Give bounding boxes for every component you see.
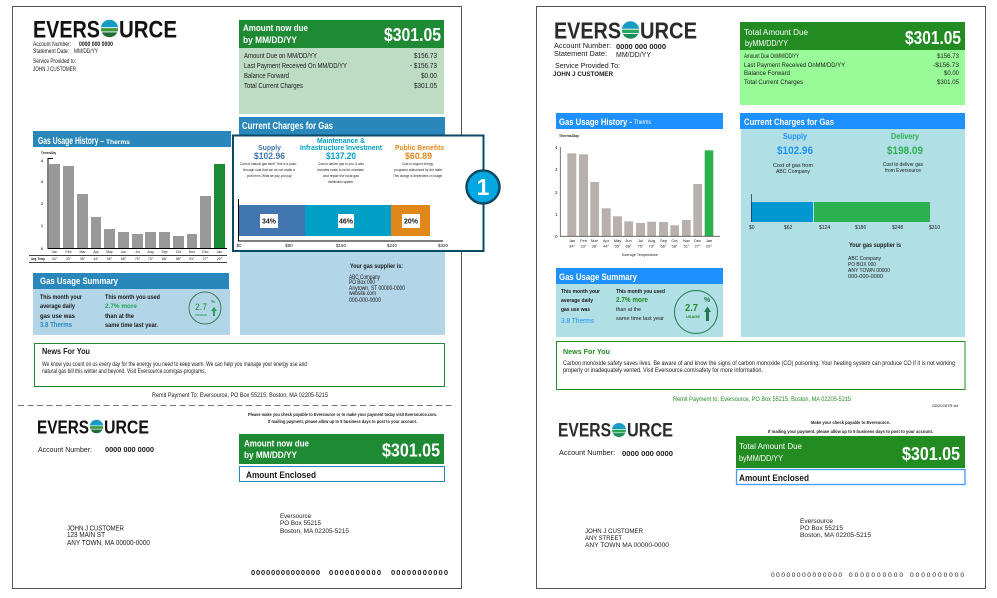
logo: Eversource payment stub <box>37 416 149 438</box>
panel: total amount due: byMM/DD/YY <box>745 39 789 48</box>
customer address: JOHN J CUSTOMER <box>585 528 643 535</box>
stub: amount due: $301.05 <box>382 440 440 460</box>
stacked bar: charge shares: 46% <box>339 218 354 226</box>
panel: gas usage summary: same time last year. <box>105 322 158 329</box>
bar chart: therms per day: 66° <box>660 244 667 248</box>
bar chart: therms per day: Mar <box>591 238 599 243</box>
panel: gas usage history: Gas Usage History – <box>38 136 104 147</box>
account details: Statement Date: <box>33 49 69 55</box>
panel: gas usage summary: 2.7% more <box>616 297 648 304</box>
charge: supply: through cost that we do not make a <box>243 168 295 172</box>
payment instructions: Make your check payable to Eversource. <box>811 420 890 425</box>
panel: gas usage history <box>555 113 723 257</box>
panel: total amount due <box>740 22 965 105</box>
stacked bar: supply and delivery: $186 <box>855 225 866 231</box>
stacked bar: supply and delivery: $310 <box>929 225 940 231</box>
bar chart: therms per day: 66° <box>162 257 168 261</box>
bar chart: therms per day: Oct <box>671 238 678 243</box>
icon: usage change gauge: % <box>211 299 215 304</box>
charge: delivery: Cost to deliver gas <box>883 162 923 168</box>
bar chart: therms per day: Oct <box>176 250 181 254</box>
bar chart: therms per day: 38° <box>80 257 86 261</box>
supplier details: Your gas supplier is <box>849 242 901 249</box>
panel: news for you: Carbon monoxide safety saves lives. Be aware of and know the signs of carbon monoxide (CO) poisoning. Your heating system can produce CO if it is not working <box>563 361 955 367</box>
icon: usage change gauge <box>674 290 718 334</box>
account details <box>33 42 114 73</box>
charge: maintenance and infrastructure investment <box>300 138 383 184</box>
bar chart: therms per day: 68° <box>121 257 127 261</box>
bar chart: therms per day: Jan <box>706 238 712 243</box>
charge: supply <box>240 145 297 178</box>
panel: gas usage summary: average daily <box>561 298 594 304</box>
bar chart: therms per day: Apr <box>93 250 100 254</box>
panel: gas usage summary: 3.8 Therms <box>561 316 594 325</box>
remit address line: Remit Payment To: Eversource, PO Box 55215, Boston, MA 02205-5215 <box>152 392 328 399</box>
panel: gas usage summary: gas use was <box>561 307 590 313</box>
account details: JOHN J CUSTOMER <box>553 71 613 78</box>
panel: total amount due: Total Current Charges <box>744 79 804 86</box>
panel: news for you: News For You <box>42 347 90 356</box>
bar chart: therms per day: 0 <box>41 247 43 251</box>
supplier details <box>348 263 406 304</box>
bar chart: therms per day: 44° <box>603 244 609 248</box>
bar chart: therms per day: 3 <box>41 180 43 184</box>
panel: amount due: by MM/DD/YY <box>243 35 297 45</box>
bar chart: therms per day <box>29 151 227 262</box>
bar chart: therms per day: 75° <box>135 257 141 261</box>
payment instructions <box>768 420 933 434</box>
bar chart: therms per day: 51° <box>683 244 690 248</box>
stub: total amount due <box>736 436 965 468</box>
charge: maintenance and infrastructure investment: Maintenance & <box>317 138 365 145</box>
bar chart: therms per day: Jan <box>52 250 57 254</box>
charge: public benefits: This charge is dependent on usage. <box>393 174 443 178</box>
charge: public benefits <box>393 145 444 178</box>
bar chart: therms per day: 73° <box>648 244 655 248</box>
bar chart: therms per day: Dec <box>694 238 701 243</box>
stub account number: 0000 000 0000 <box>105 445 154 454</box>
panel: gas usage summary: Gas Usage Summary <box>40 276 119 287</box>
charge: supply: Supply <box>258 145 281 152</box>
remittance address: PO Box 55215 <box>280 520 321 527</box>
customer address: ANY TOWN MA 00000-0000 <box>585 542 669 549</box>
supplier details: ABC Company <box>349 275 380 281</box>
panel: amount due: Total Current Charges <box>244 83 303 90</box>
bar chart: therms per day: 38° <box>591 244 598 248</box>
charge: supply: profit from. What we pay, you pay. <box>247 174 292 178</box>
bar chart: therms per day: Aug <box>147 250 154 254</box>
payment instructions: Please make you check payable to Eversource or to make your payment today visit Eversource.com. <box>248 412 437 417</box>
stub account number: Account Number: <box>38 445 92 454</box>
panel: amount due <box>239 20 444 114</box>
panel: amount due: Balance Forward <box>244 73 289 80</box>
bar chart: therms per day: 29° <box>706 244 712 248</box>
icon: usage change gauge <box>189 292 221 324</box>
panel: gas usage summary: Gas Usage Summary <box>559 272 638 283</box>
bar chart: therms per day: Nov <box>683 238 690 243</box>
panel: gas usage history: Gas Usage History - <box>559 117 632 128</box>
bar chart: therms per day: Sep <box>660 238 668 243</box>
icon: usage change gauge: 2.7 <box>195 302 207 312</box>
bar chart: therms per day: Therms/Day <box>41 151 56 155</box>
bar chart: therms per day: 68° <box>625 244 632 248</box>
logo: Eversource payment stub: EVERS <box>37 416 89 438</box>
logo: Eversource payment stub: URCE <box>627 420 673 442</box>
charge: delivery <box>883 132 923 174</box>
bar chart: therms per day: 58° <box>671 244 678 248</box>
panel: amount due: Amount Due on MM/DD/YY <box>244 53 317 60</box>
panel: total amount due: $301.05 <box>937 79 959 86</box>
bar chart: therms per day: Feb <box>580 238 588 243</box>
bar chart: therms per day: Jan <box>217 250 222 254</box>
stub: amount enclosed: Amount Enclosed <box>246 470 316 480</box>
callout: highlighted charges box with badge <box>233 136 500 251</box>
logo: Eversource payment stub: EVERS <box>558 420 611 442</box>
panel: gas usage summary <box>556 268 723 337</box>
charge: public benefits: Cost to support energy <box>402 162 433 166</box>
panel: total amount due: $156.73 <box>937 53 959 60</box>
logo: Eversource <box>554 18 697 44</box>
remittance address: Eversource <box>800 518 833 525</box>
stub: amount due: Amount now due <box>244 438 309 448</box>
remit address line: Remit Payment to: Eversource, PO Box 55215, Boston, MA 02205-5215 <box>673 396 851 403</box>
supplier details: Your gas supplier is: <box>350 263 403 270</box>
panel: gas usage summary: This month your <box>40 294 82 301</box>
stacked bar: supply and delivery: $124 <box>819 225 830 231</box>
remittance address: PO Box 55215 <box>800 525 843 532</box>
scan line digits: 00000000000000 <box>771 572 842 579</box>
account details: Account Number: <box>554 41 611 50</box>
remittance address: Eversource <box>280 513 311 520</box>
payment instructions: If mailing payment, please allow up to 5 business days to post to your account. <box>268 419 417 424</box>
panel: gas usage summary: average daily <box>40 303 75 310</box>
panel: gas usage history: Therms <box>634 120 651 126</box>
charge: supply: Cost of natural gas itself. This is a pass- <box>240 162 297 166</box>
logo: Eversource <box>33 16 177 44</box>
panel: news for you: properly or inadequately vented. Visit Eversource.com/safety for more information. <box>563 368 763 374</box>
stacked bar: charge shares: 34% <box>262 218 277 226</box>
panel: gas usage summary: This month your <box>561 289 601 295</box>
panel: redesigned bill (right page) <box>536 6 986 588</box>
remittance address: Boston, MA 02205-5215 <box>280 528 349 535</box>
panel: gas usage summary: This month you used <box>616 289 665 295</box>
bar chart: therms per day: 29° <box>217 257 223 261</box>
bar chart: therms per day: 1 <box>555 212 558 217</box>
stub: total amount due: byMM/DD/YY <box>739 454 784 463</box>
form code: GB2026TR.txt <box>932 404 958 408</box>
supplier details: Anytown, ST 00000-0000 <box>349 286 406 292</box>
charge: public benefits: programs authorized by the state. <box>394 168 443 172</box>
panel: total amount due: Amount Due OnMM/DD/YY <box>744 53 799 60</box>
logo: Eversource payment stub <box>558 420 673 442</box>
bar chart: therms per day: 27° <box>203 257 209 261</box>
panel: current bill (left page) <box>12 6 483 588</box>
supplier details: website.com <box>348 291 376 297</box>
panel: gas usage summary: This month you used <box>105 294 160 301</box>
panel: amount due: $301.05 <box>414 83 437 90</box>
panel: total amount due: -$156.73 <box>933 62 959 69</box>
supplier details: ANY TOWN 00000 <box>848 268 890 274</box>
panel: news for you: News For You <box>563 347 610 356</box>
bar chart: therms per day: Mar <box>79 250 86 254</box>
customer address: JOHN J CUSTOMER <box>67 526 124 532</box>
bar chart: therms per day: Jan <box>569 238 575 243</box>
charge: maintenance and infrastructure investment: includes costs to build, maintain <box>317 168 364 172</box>
bar chart: therms per day <box>555 133 720 257</box>
bar chart: therms per day: Jul <box>638 238 643 243</box>
account details: MM/DD/YY <box>74 49 98 55</box>
panel: amount due: $156.73 <box>414 53 437 60</box>
customer address: 123 MAIN ST <box>67 532 106 539</box>
panel: gas usage history: Therms <box>106 140 131 146</box>
panel: amount due: Amount now due <box>243 23 308 33</box>
stacked bar: charge shares <box>236 199 449 248</box>
account details: Service Provided to: <box>33 59 76 65</box>
account details: JOHN J CUSTOMER <box>33 67 76 73</box>
charge: supply: ABC Company <box>776 169 810 175</box>
bar chart: therms per day: Jun <box>625 238 632 243</box>
bar chart: therms per day: May <box>614 238 621 243</box>
supplier details <box>848 242 901 280</box>
charge: maintenance and infrastructure investment: $137.20 <box>326 151 356 162</box>
stacked bar: charge shares: $160 <box>336 243 347 248</box>
stacked bar: supply and delivery <box>749 194 940 231</box>
stacked bar: charge shares: $240 <box>387 243 398 248</box>
bar chart: therms per day: Feb <box>65 250 72 254</box>
bar chart: therms per day: 51° <box>189 257 195 261</box>
charge: maintenance and infrastructure investment: Infrastructure Investment <box>300 145 383 152</box>
bar chart: therms per day: 55° <box>614 244 621 248</box>
panel: gas usage summary: gas use was <box>40 313 75 320</box>
account details: Service Provided To: <box>555 61 620 70</box>
scan line digits: 0000000000 <box>329 568 381 577</box>
stub account number: Account Number: <box>559 450 615 457</box>
panel: amount due: $0.00 <box>421 73 437 80</box>
panel: amount due: - $156.73 <box>410 63 437 70</box>
customer address <box>585 528 669 549</box>
supplier details: 000-000-0000 <box>848 274 883 280</box>
charge: maintenance and infrastructure investment: distribution system. <box>328 180 354 184</box>
stub: amount enclosed <box>240 466 444 482</box>
panel: gas usage history <box>29 131 231 262</box>
bar chart: therms per day: 2 <box>41 202 43 206</box>
logo: Eversource: URCE <box>119 16 177 44</box>
stacked bar: charge shares: $320 <box>438 243 449 248</box>
bar chart: therms per day: Aug <box>648 238 655 243</box>
account details: MM/DD/YY <box>616 50 651 59</box>
account details <box>553 41 666 78</box>
bar chart: therms per day: 34° <box>569 244 575 248</box>
bar chart: therms per day: Jun <box>121 250 126 254</box>
bar chart: therms per day: 0 <box>555 234 558 239</box>
charge: delivery: from Eversource <box>885 168 921 174</box>
logo: Eversource: URCE <box>640 18 697 44</box>
charge: supply <box>773 132 813 175</box>
payment instructions: If mailing your payment, please allow up to 5 business days to post to your account. <box>768 429 933 434</box>
remittance address <box>800 518 871 539</box>
account details: 0000 000 0000 <box>616 42 666 51</box>
stub: amount enclosed: Amount Enclosed <box>739 473 809 483</box>
bar chart: therms per day: 34° <box>52 257 58 261</box>
icon: usage change gauge: % <box>704 297 711 304</box>
supplier details: ABC Company <box>848 256 881 262</box>
payment instructions <box>248 412 437 424</box>
bar chart: therms per day: Nov <box>189 250 195 254</box>
panel: total amount due: $301.05 <box>905 28 961 48</box>
remittance address <box>280 513 349 535</box>
icon: usage change gauge: USAGE <box>195 313 207 317</box>
panel: news for you <box>34 344 444 386</box>
customer address <box>67 526 150 547</box>
charge: delivery: Delivery <box>891 132 919 141</box>
icon: usage change gauge: USAGE <box>686 315 701 319</box>
bar chart: therms per day: 2 <box>555 190 558 195</box>
supplier details: PO Box 000 <box>349 280 376 286</box>
bar chart: therms per day: 58° <box>176 257 182 261</box>
logo: Eversource: EVERS <box>554 18 621 44</box>
panel: total amount due: Total Amount Due <box>744 28 809 37</box>
bar chart: therms per day: May <box>106 250 113 254</box>
charge: public benefits: $60.89 <box>405 151 432 162</box>
stub account number: 0000 000 0000 <box>622 449 673 458</box>
logo: Eversource: EVERS <box>33 16 100 44</box>
scan line digits: 00000000000000 <box>251 568 320 577</box>
panel: total amount due: $0.00 <box>944 70 959 77</box>
bar chart: therms per day: 33° <box>580 244 587 248</box>
charge: maintenance and infrastructure investment: Cost to deliver gas to you. It also <box>318 162 364 166</box>
scan line digits: 0000000000 <box>849 572 903 579</box>
bar chart: therms per day: 73° <box>148 257 154 261</box>
panel: total amount due: Last Payment Received OnMM/DD/YY <box>744 62 846 69</box>
panel: gas usage summary: than at the <box>616 307 641 313</box>
panel: current charges for gas <box>233 117 483 335</box>
stacked bar: charge shares: 20% <box>404 218 419 226</box>
account details: Account Number: <box>33 42 71 48</box>
stub: amount due <box>239 434 444 464</box>
stacked bar: supply and delivery: $248 <box>892 225 903 231</box>
charge: supply: Cost of gas from <box>773 163 813 169</box>
scan line digits <box>251 568 448 577</box>
charge: maintenance and infrastructure investment: and repair the local gas <box>323 174 359 178</box>
stacked bar: supply and delivery: $0 <box>749 225 755 231</box>
panel: amount due: $301.05 <box>384 25 441 45</box>
panel: gas usage summary: same time last year <box>616 316 664 322</box>
scan line digits: 00000000000 <box>391 568 448 577</box>
charge: supply: $102.96 <box>254 151 285 162</box>
bar chart: therms per day: 33° <box>66 257 72 261</box>
stub: amount enclosed <box>736 470 965 484</box>
stub account number <box>559 449 673 458</box>
bar chart: therms per day: 27° <box>694 244 701 248</box>
bar chart: therms per day: 3 <box>555 167 558 172</box>
panel: current charges for gas: Current Charges for Gas <box>744 117 834 128</box>
scan line digits <box>771 572 964 579</box>
stacked bar: charge shares: $80 <box>285 243 293 248</box>
bar chart: therms per day: 1 <box>41 224 43 228</box>
charge: public benefits: Public Benefits <box>395 145 444 152</box>
stacked bar: supply and delivery: $62 <box>784 225 793 231</box>
icon: usage change gauge: 2.7 <box>685 303 698 314</box>
panel: gas usage summary: 2.7% more <box>105 303 137 310</box>
bar chart: therms per day: 44° <box>93 257 99 261</box>
panel: amount due: Last Payment Received On MM/DD/YY <box>244 63 347 70</box>
bar chart: therms per day: Avg. Temp <box>31 257 45 261</box>
customer address: ANY TOWN, MA 00000-0000 <box>67 540 150 547</box>
panel: news for you: natural gas bill this winter and beyond. Visit Eversource.com/gas-programs. <box>42 369 206 375</box>
remittance address: Boston, MA 02205-5215 <box>800 532 871 539</box>
bar chart: therms per day: Average Temperature <box>622 252 659 257</box>
charge: supply: Supply <box>783 132 807 141</box>
bar chart: therms per day: Sep <box>161 250 168 254</box>
panel: news for you <box>556 342 965 390</box>
bar chart: therms per day: 55° <box>107 257 113 261</box>
supplier details: PO BOX 000 <box>848 262 876 268</box>
account details: Statement Date: <box>554 49 607 58</box>
panel: gas usage summary: than at the <box>105 313 134 320</box>
stub: total amount due: $301.05 <box>902 444 960 464</box>
panel: current charges for gas <box>740 113 965 337</box>
stub: total amount due: Total Amount Due <box>739 442 803 451</box>
customer address: ANY STREET <box>585 535 622 542</box>
bar chart: therms per day: Therms/Day <box>559 133 580 138</box>
stub account number <box>38 445 154 454</box>
stacked bar: charge shares: $0 <box>236 243 242 248</box>
panel: total amount due: Balance Forward <box>744 70 790 77</box>
bar chart: therms per day: 4 <box>555 145 558 150</box>
callout: highlighted charges box with badge: 1 <box>477 174 490 200</box>
account details: 0000 000 0000 <box>79 42 114 48</box>
bar chart: therms per day: Apr <box>603 238 610 243</box>
bar chart: therms per day: Jul <box>135 250 140 254</box>
bar chart: therms per day: 4 <box>41 159 43 163</box>
charge: supply: $102.96 <box>777 145 813 157</box>
charge: delivery: $198.09 <box>887 145 923 157</box>
logo: Eversource payment stub: URCE <box>104 416 149 438</box>
stub: amount due: by MM/DD/YY <box>244 450 297 460</box>
panel: current charges for gas: Current Charges for Gas <box>242 121 333 132</box>
panel: gas usage summary <box>33 273 230 335</box>
bar chart: therms per day: 75° <box>637 244 644 248</box>
supplier details: 000-000-0000 <box>349 298 382 304</box>
bar chart: therms per day: Dec <box>202 250 209 254</box>
panel: news for you: We know you count on us every day for the energy you need to keep warm. We can help you manage your energy use and <box>42 362 307 368</box>
scan line digits: 0000000000 <box>910 572 964 579</box>
panel: gas usage summary: 3.8 Therms <box>40 322 72 329</box>
